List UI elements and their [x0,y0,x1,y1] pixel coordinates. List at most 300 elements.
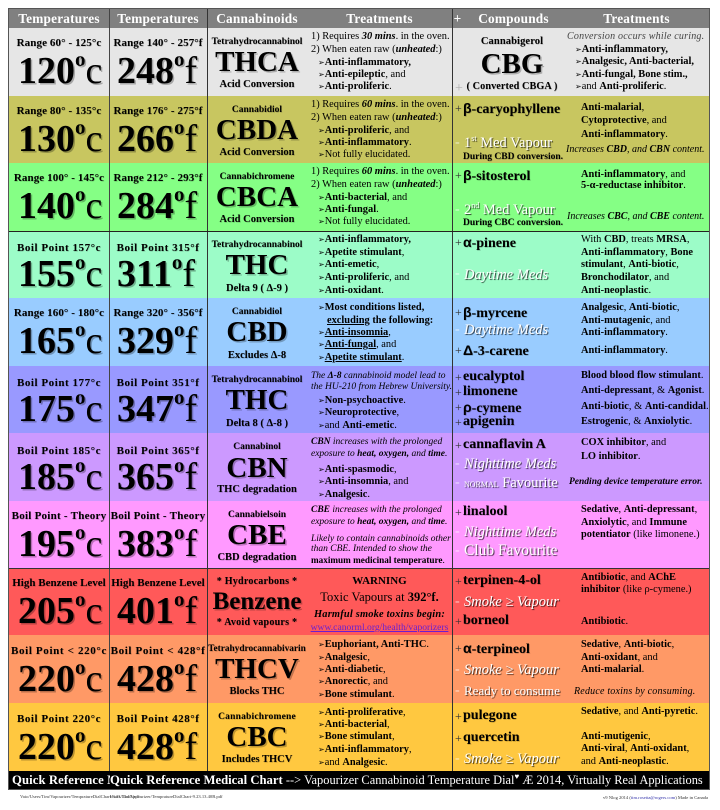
cannabinoid cell [216,105,300,158]
treatments cell [307,703,452,771]
fahrenheit cell: Range 140° - 257°f [113,37,203,49]
fahrenheit cell: 383of [117,520,197,565]
fahrenheit cell: 428of [117,655,197,700]
treatments cell: 1) Requires 60 mins. in the oven. [311,99,450,110]
treatments cell: ➢Apetite stimulant, [318,247,404,258]
compound cell: ( Converted CBGA ) [467,81,557,92]
treatments cell [307,635,452,703]
celsius cell: Boil Point < 220°c [11,645,107,657]
compound cell: Daytime Meds [464,267,548,283]
right treatments cell: Anti-oxidant, and [581,652,658,663]
warning cell: WARNING [352,575,407,587]
treatments cell [311,371,452,431]
treatments cell: exposure to heat, oxygen, and time. [311,517,447,527]
compound cell: α-pinene [463,234,516,251]
fahrenheit cell: 284of [117,182,197,227]
cannabinoid cell: THC degradation [217,484,297,495]
fahrenheit cell: 329of [117,317,197,362]
right treatments cell [564,703,709,771]
treatments cell: excluding the following: [327,315,433,326]
compound cell: Daytime Meds [464,322,548,338]
treatments cell: ➢Not fully elucidated. [318,149,410,160]
cannabinoid cell: Cannabinol [233,442,281,452]
cannabinoid cell: * Avoid vapours * [217,617,297,628]
right treatments cell [564,501,709,568]
right treatments cell: Bronchodilator, and [581,272,669,283]
treatments cell: ➢Anti-inflammatory, [318,57,411,68]
fahrenheit cell: Boil Point 365°f [117,445,199,457]
right treatments cell: and Anti-neoplastic. [581,756,669,767]
right treatments cell [564,568,709,635]
compound cell: terpinen-4-ol [463,573,541,588]
cannabinoid cell: Tetrahydrocannabivarin [208,644,306,654]
compound cell: β-myrcene [463,304,527,321]
treatments cell: ➢Anorectic, and [318,676,388,687]
treatments cell: exposure to heat, oxygen, and time. [311,449,447,459]
celsius cell: 175oc [18,385,102,430]
treatments cell: 2) When eaten raw (unheated:) [311,112,442,123]
right treatments cell: ➢and Anti-proliferic. [575,81,666,92]
cannabinoid cell: Cannabichromene [218,712,296,722]
compound cell: + [455,505,462,519]
compound cell [452,433,564,501]
compound cell: quercetin [463,730,520,745]
compound cell [452,635,564,703]
celsius cell: Range 100° - 145°c [14,172,104,184]
compound cell [452,501,564,568]
cannabinoid cell: Acid Conversion [220,214,294,225]
cannabinoid cell: Tetrahydrocannabinol [212,375,302,385]
right treatments cell [564,635,709,703]
compound cell: apigenin [463,414,514,429]
right treatments cell [567,169,704,222]
cannabinoid cell [207,635,307,703]
compound cell: + [455,415,462,429]
cannabinoid cell: Cannabichromene [220,172,294,182]
footer: chart title: Quick Reference Medical Chart --> Vapourizer Cannabinoid Temperature Dial♥ Æ 2014, Virtually Real Applications [110,772,703,787]
right treatments cell [581,234,693,296]
celsius cell [9,635,109,703]
right treatments cell: Increases CBD, and CBN content. [566,144,705,155]
compound cell: + [455,709,462,723]
compound cell: + [455,574,462,588]
right treatments cell [567,31,704,92]
compound cell [455,304,549,359]
cannabinoid cell: CBN [226,452,288,484]
cannabinoid cell: * Hydrocarbons * [217,576,297,587]
treatments cell: CBN increases with the prolonged [311,437,442,447]
treatments cell: 2) When eaten raw (unheated:) [311,44,442,55]
compound cell: + [455,731,462,745]
celsius cell: 220oc [18,723,102,768]
row: 175c THC delta 8 [9,366,709,433]
treatments cell: ➢Anti-fungal. [318,204,379,215]
treatments cell: ➢Anti-oxidant. [318,285,384,296]
right treatments cell: 5-α-reductase inhibitor. [581,180,686,191]
compound cell: Smoke ≥ Vapour [464,662,559,678]
treatments cell: ➢Apetite stimulant. [318,352,404,363]
treatments cell: ➢Anti-emetic, [318,259,379,270]
cannabinoid cell: Cannabielsoin [228,510,286,520]
compound cell [452,703,564,771]
right treatments cell: ➢Analgesic, Anti-bacterial, [575,56,694,67]
compound cell: eucalyptol [463,369,524,384]
compound cell: Smoke ≥ Vapour [464,751,559,767]
compound cell: - [455,135,460,150]
compound cell [455,100,563,162]
compound cell: During CBC conversion. [463,218,563,228]
treatments cell: ➢Analgesic. [318,489,370,500]
fahrenheit cell: Boil Point 428°f [117,713,199,725]
cannabinoid cell: Cannabidiol [232,105,282,115]
celsius cell: 155oc [18,250,102,295]
compound cell: + [455,305,462,319]
compound cell: + [455,400,462,414]
treatments cell [318,302,433,363]
fahrenheit cell: 311of [117,250,195,295]
treatments cell: ➢Anti-proliferic, and [318,125,409,136]
cannabinoid cell [212,375,303,429]
right treatments cell: Increases CBC, and CBE content. [567,211,704,222]
celsius cell: 130oc [18,115,102,160]
right treatments cell: Blood blood flow stimulant. [581,370,703,381]
compound cell: Cannabigerol [481,36,543,47]
cannabinoid cell: THCA [215,46,299,78]
right treatments cell: Anti-mutigenic, [581,731,651,742]
compound cell: + [455,235,462,249]
compound cell: - [455,751,460,766]
fahrenheit cell: Range 212° - 293°f [113,172,203,184]
row: 155c THC delta 9 [9,231,709,298]
fahrenheit cell: Boil Point 351°f [117,377,199,389]
right treatments cell: Anti-malarial, [581,102,644,113]
treatments cell: Likely to contain cannabinoids other [311,534,451,544]
warning cell: Toxic Vapours at 392°f. [320,590,439,604]
celsius cell: Range 60° - 125°c [17,37,101,49]
celsius cell: 195oc [18,520,102,565]
compound cell [455,36,558,96]
compound cell: - [455,543,460,558]
header: plus: + [454,11,461,26]
celsius cell [9,501,109,568]
row: 165c CBD [9,298,709,366]
treatments cell [311,31,450,92]
compound cell: β-sitosterol [463,167,530,184]
treatments cell: ➢Non-psychoactive. [318,395,406,406]
right treatments cell: Anti-viral, Anti-oxidant, [581,743,689,754]
compound cell: + [455,641,462,655]
celsius cell: Boil Point 220°c [17,713,101,725]
compound cell: CBG [481,48,543,80]
compound cell: Δ-3-carene [463,342,529,359]
cannabinoid cell: Acid Conversion [220,79,294,90]
treatments cell [311,166,450,227]
right treatments cell: Sedative, Anti-biotic, [581,639,674,650]
treatments cell: 2) When eaten raw (unheated:) [311,179,442,190]
treatments cell: ➢Analgesic, [318,652,370,663]
treatments cell: ➢and Analgesic. [318,757,388,768]
treatments cell: ➢Anti-fungal, and [318,339,396,350]
celsius cell: Range 80° - 135°c [17,105,101,117]
fahrenheit cell [109,703,207,771]
header bar [9,9,709,28]
compound cell: Club Favourite [464,542,557,559]
right treatments cell [581,302,679,356]
header: cannabinoids: Cannabinoids [216,11,298,26]
fahrenheit cell: 365of [117,453,197,498]
treatments cell: ➢Bone stimulant, [318,731,395,742]
cannabinoid cell: Delta 9 ( Δ-9 ) [226,283,288,294]
right treatments cell: Cytoprotective, and [581,115,667,126]
cannabinoid cell: CBDA [216,114,298,146]
compound cell: - [455,524,460,539]
right treatments cell: Anxiolytic, and Immune [581,517,687,528]
cannabinoid cell: Cannabidiol [232,307,282,317]
treatments cell: ➢Anti-insomnia, [318,327,391,338]
compound cell: ρ-cymene [463,399,521,416]
treatments cell: ➢Neuroprotective, [318,407,399,418]
fahrenheit cell: 401of [117,587,197,632]
cannabinoid cell: CBD [226,316,288,348]
cannabinoid cell [207,703,307,771]
fahrenheit cell: 266of [117,115,197,160]
compound cell: NORMAL Favourite [464,475,558,491]
file path note middle: Users/Tim/Vapourizer/TempratureDialChart-9.23.13.40B.pdf [110,794,223,799]
warning cell: Harmful smoke toxins begin: [314,609,445,620]
treatments cell: ➢Anti-bacterial, and [318,192,407,203]
treatments cell: ➢Anti-bacterial, [318,719,390,730]
right treatments cell: ➢Anti-inflammatory, [575,44,668,55]
compound cell: + [455,81,463,96]
cannabinoid cell: CBC [226,721,288,753]
cannabinoid cell: Blocks THC [230,686,284,697]
right treatments cell: inhibitor (like ρ-cymene.) [581,584,692,595]
celsius cell [9,703,109,771]
treatments cell: ➢Not fully elucidated. [318,216,410,227]
cannabinoid cell [207,568,307,635]
fahrenheit cell: Range 176° - 275°f [113,105,203,117]
right treatments cell: With CBD, treats MRSA, [581,234,689,245]
cannabinoid cell: Includes THCV [222,754,292,765]
cannabinoid cell: THCV [215,653,299,685]
celsius cell: Boil Point 177°c [17,377,101,389]
right treatments cell: COX inhibitor, and [581,437,666,448]
cannabinoid cell [207,501,307,568]
cannabinoid cell: CBE [227,519,287,551]
credit note: v9 Nlog 2014 (tim.rosetta@rogers.com) Made in Canada [603,795,708,800]
header: temperatures celsius: Temperatures [18,11,100,26]
right treatments cell [564,433,709,501]
cannabinoid cell: Delta 8 ( Δ-8 ) [226,418,288,429]
right treatments cell: Anti-inflammatory. [581,129,668,140]
right treatments cell: Antibiotic. [581,616,628,627]
treatments cell: ➢Anti-inflammatory, [318,234,411,245]
right treatments cell: ➢Anti-fungal, Bone stim., [575,69,688,80]
treatments cell: ➢Anti-proliferative, [318,707,406,718]
cannabinoid cell: THC [226,249,288,281]
compound cell: + [455,614,462,628]
celsius cell: 165oc [18,317,102,362]
right treatments cell [566,102,705,155]
compound cell: 2nd Med Vapour [464,201,555,218]
right treatments cell: Sedative, Anti-depressant, [581,504,697,515]
compound cell: limonene [463,384,517,399]
right treatments cell: Anti-biotic, & Anti-candidal. [581,401,709,412]
cannabinoid cell: CBCA [216,181,298,213]
compound cell: - [455,594,460,609]
celsius cell: 205oc [18,587,102,632]
fahrenheit cell: High Benzene Level [111,577,205,589]
compound cell: α-terpineol [463,640,530,657]
fahrenheit cell [109,568,207,635]
fahrenheit cell [109,635,207,703]
fahrenheit cell: Range 320° - 356°f [113,307,203,319]
fahrenheit cell: 347of [117,385,197,430]
cannabinoid cell: Benzene [213,588,301,615]
treatments cell: 1) Requires 60 mins. in the oven. [311,166,450,177]
row: 185c CBN [9,433,709,501]
right treatments cell: potentiator (like limonene.) [581,529,700,540]
compound cell: + [455,343,462,357]
right treatments cell: Analgesic, Anti-biotic, [581,302,679,313]
cannabinoid cell [216,172,300,225]
compound cell: + [455,168,462,182]
right treatments cell: Anti-depressant, & Agonist. [581,385,704,396]
row: 130c CBDA [9,96,709,163]
celsius cell: 185oc [18,453,102,498]
row: 205c Benzene warning [9,568,709,635]
right treatments cell: Estrogenic, & Anxiolytic. [581,416,692,427]
cannabinoid cell [217,442,298,495]
treatments cell: ➢Anti-proliferic. [318,81,392,92]
compound cell: borneol [463,613,509,628]
right treatments cell: Pending device temperature error. [569,477,703,487]
compound cell: During CBD conversion. [463,152,563,162]
right treatments cell: Anti-inflammatory. [581,327,668,338]
celsius cell: Range 160° - 180°c [14,307,104,319]
compound cell: - [455,475,460,490]
compound cell: - [455,202,460,217]
compound cell: - [455,456,460,471]
right treatments cell [581,370,709,427]
celsius cell: 140oc [18,182,102,227]
treatments cell: maximum medicinal temperature. [311,555,445,565]
celsius cell: Boil Point 157°c [17,242,101,254]
compound cell [455,167,564,228]
treatments cell: ➢Bone stimulant. [318,689,395,700]
row: 220c CBC [9,703,709,771]
cannabinoid cell [212,240,303,294]
treatments cell [311,437,447,500]
treatments cell [311,99,450,160]
compound cell: Ready to consume [464,683,560,698]
celsius cell [9,568,109,635]
right treatments cell: Anti-malarial. [581,664,644,675]
treatments cell: ➢Most conditions listed, [318,302,424,313]
fahrenheit cell: Boil Point - Theory [111,510,205,522]
right treatments cell: Anti-mutagenic, and [581,315,670,326]
treatments cell: ➢and Anti-emetic. [318,420,397,431]
row: 120c THCA [9,28,709,96]
treatments cell: ➢Anti-inflammatory, [318,744,412,755]
treatments cell: the HU-210 from Hebrew University. [311,382,452,392]
fahrenheit cell [109,501,207,568]
treatments cell: than CBE. Intended to show the [311,544,432,554]
right treatments cell: Anti-neoplastic. [581,285,651,296]
compound cell: + [455,370,462,384]
compound cell: + [455,101,462,115]
treatments cell: The Δ-8 cannabinoid model lead to [311,371,445,381]
cannabinoid cell: THC [226,384,288,416]
header: treatments: Treatments [346,11,413,26]
cannabinoid cell: Tetrahydrocannabinol [212,37,302,47]
right treatments cell: Sedative, and Anti-pyretic. [581,706,698,717]
fahrenheit cell: Boil Point < 428°f [111,645,205,657]
cannabinoid cell: CBD degradation [217,552,297,563]
right treatments cell: Anti-inflammatory, and [581,169,685,180]
celsius cell: Boil Point - Theory [12,510,106,522]
compound cell: + [455,385,462,399]
compound cell: + [455,438,462,452]
right treatments cell: Conversion occurs while curing. [567,31,704,42]
compound cell: Smoke ≥ Vapour [464,594,559,610]
treatments cell: ➢Anti-inflammatory. [318,137,412,148]
celsius cell: High Benzene Level [12,577,106,589]
treatments cell: CBE increases with the prolonged [311,505,442,515]
cannabinoid cell: Acid Conversion [220,147,294,158]
treatments cell: ➢Anti-insomnia, and [318,476,408,487]
compound cell: - [455,662,460,677]
fahrenheit cell: 248of [117,47,197,92]
row: 195c CBE [9,501,709,568]
compound cell: - [455,266,460,281]
right treatments cell: LO inhibitor. [581,451,640,462]
right treatments cell: Reduce toxins by consuming. [574,686,695,697]
header: compounds: Compounds [478,11,549,26]
treatments cell: 1) Requires 30 mins. in the oven. [311,31,450,42]
treatments cell: ➢Anti-spasmodic, [318,464,397,475]
right treatments cell: Anti-inflammatory. [581,345,668,356]
celsius cell: 220oc [18,655,102,700]
celsius cell: Boil Point 185°c [17,445,101,457]
compound cell [452,568,564,635]
cannabinoid cell [212,37,303,90]
treatments cell: ➢Anti-diabetic, [318,664,386,675]
row: 220c THCV [9,635,709,703]
cannabinoid cell: Excludes Δ-8 [228,350,286,361]
compound cell: - [455,322,460,337]
warning cell [307,568,452,635]
cannabinoid cell [226,307,288,361]
compound cell [455,369,525,429]
compound cell: Nighttime Meds [464,524,556,540]
compound cell: Nighttime Meds [464,456,556,472]
compound cell: β-caryophyllene [463,100,560,117]
right treatments cell: Anti-inflammatory, Bone [581,247,693,258]
fahrenheit cell: Boil Point 315°f [117,242,199,254]
footer bar [9,771,709,789]
treatments cell [318,234,411,296]
treatments cell: ➢Anti-epileptic, and [318,69,406,80]
treatments cell [307,501,452,568]
compound cell: pulegone [463,708,517,723]
header: temperatures fahrenheit: Temperatures [117,11,199,26]
compound cell [455,234,549,284]
treatments cell: ➢Anti-proliferic, and [318,272,409,283]
compound cell: linalool [463,504,507,519]
header: treatments right: Treatments [603,11,670,26]
row: 140c CBCA [9,163,709,231]
